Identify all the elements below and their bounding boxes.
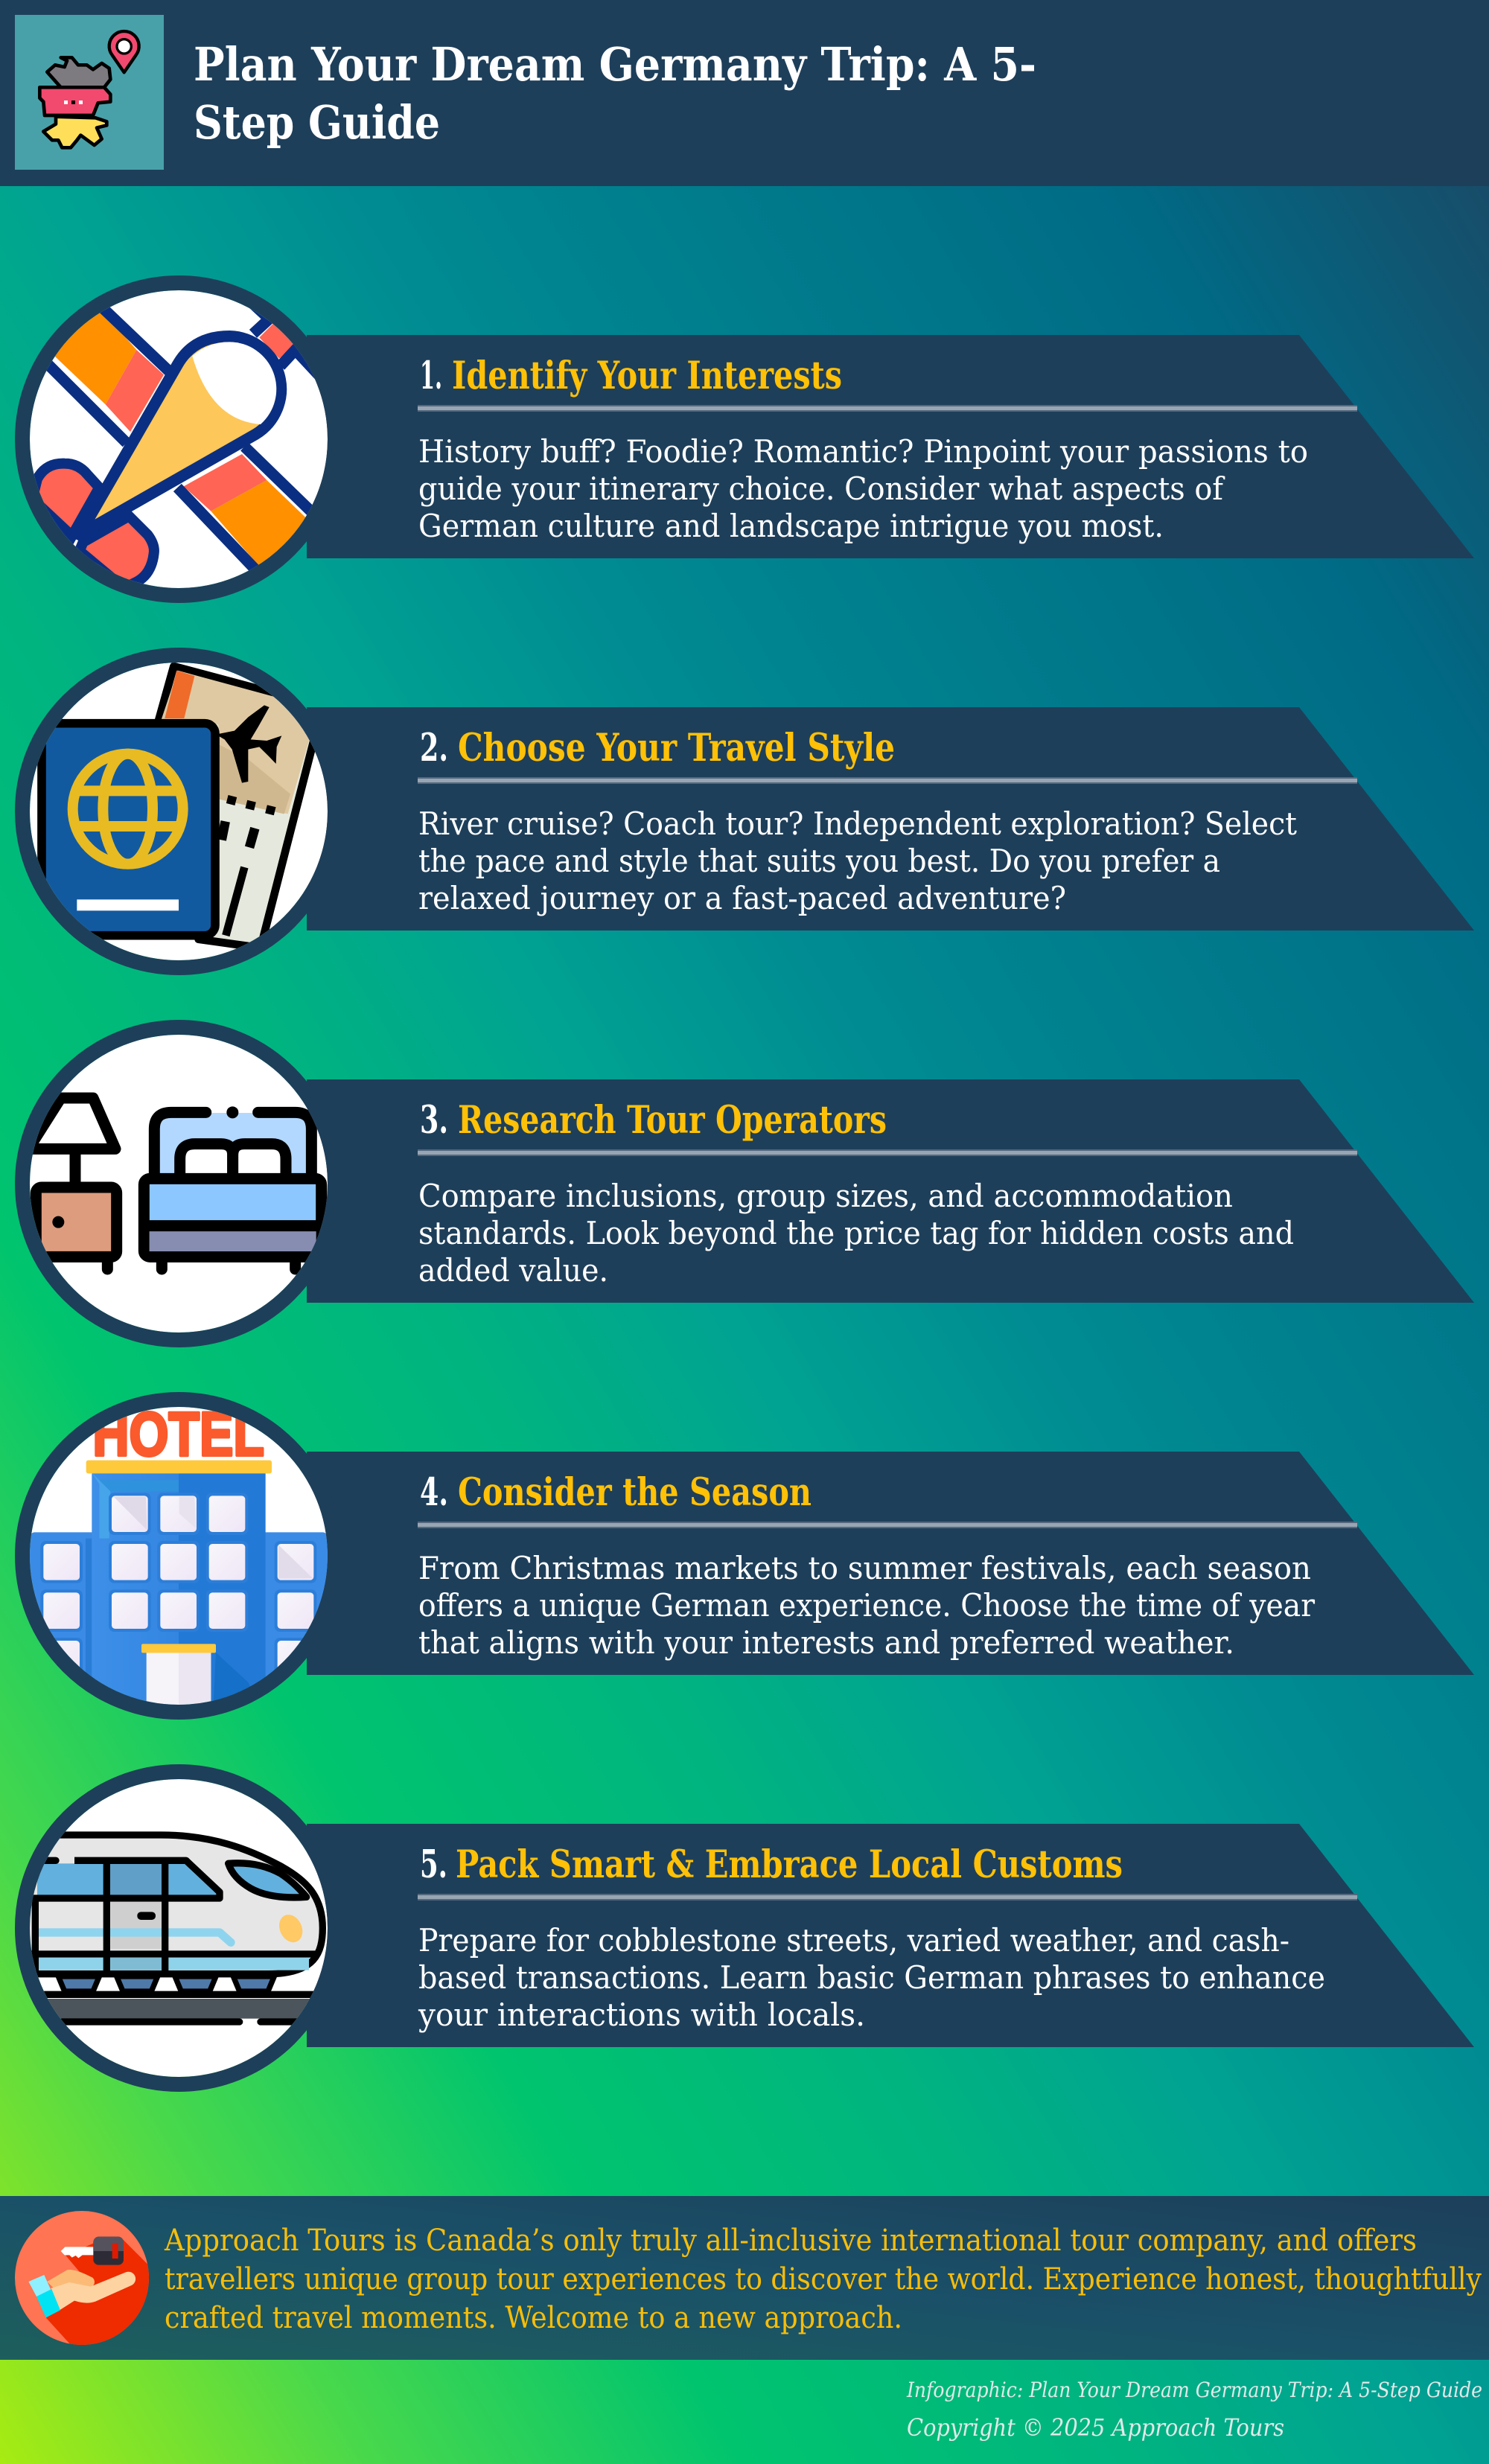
heading: step 5: Pack Smart & Embrace Local Customs xyxy=(456,1842,1123,1887)
heading: step 3: 3. xyxy=(420,1098,448,1143)
heading: step 4: 4. xyxy=(420,1470,448,1515)
text: step 1 body: guide your itinerary choice. Consider what aspects of xyxy=(418,470,1225,507)
panel: step 5 banner xyxy=(307,1824,1474,2047)
text: step 5 body: based transactions. Learn basic German phrases to enhance xyxy=(418,1959,1325,1996)
text: step 5 body: your interactions with locals. xyxy=(418,1997,865,2033)
title: Step Guide xyxy=(194,95,440,150)
icon: passport and ticket circle xyxy=(22,655,335,968)
text: step 3 body: standards. Look beyond the price tag for hidden costs and xyxy=(418,1215,1294,1251)
text: step 1 body: German culture and landscape intrigue you most. xyxy=(418,508,1164,544)
text: company description xyxy=(164,2224,1482,2335)
icon: map pin circle xyxy=(22,283,335,596)
text: company description: crafted travel moments. Welcome to a new approach. xyxy=(165,2301,902,2335)
icon: hotel circle xyxy=(22,1399,335,1712)
icon: Germany map with pin xyxy=(15,15,164,170)
footer credit text xyxy=(906,2378,1482,2442)
icon: hotel circle: HOTEL xyxy=(92,1399,264,1469)
text: step 2 body xyxy=(418,805,1297,916)
header bar xyxy=(0,0,1489,186)
heading: step 1: Identify Your Interests xyxy=(452,354,842,398)
text: step 4 body: that aligns with your interests and preferred weather. xyxy=(418,1624,1234,1661)
text: step 5 body: Prepare for cobblestone streets, varied weather, and cash- xyxy=(418,1922,1289,1959)
heading: step 4: Consider the Season xyxy=(458,1470,812,1515)
heading: step 5: 5. xyxy=(420,1842,447,1887)
text: step 4 body: offers a unique German experience. Choose the time of year xyxy=(418,1587,1316,1624)
text: step 3 body xyxy=(418,1178,1294,1289)
text: step 5 body xyxy=(418,1922,1325,2033)
footer credit text: Copyright © 2025 Approach Tours xyxy=(907,2413,1284,2442)
text: step 3 body: added value. xyxy=(418,1252,608,1289)
text: step 4 body: From Christmas markets to summer festivals, each season xyxy=(418,1550,1311,1586)
icon: hand holding key xyxy=(15,2211,149,2345)
icon: train circle xyxy=(15,1772,335,2084)
text: step 2 body: the pace and style that suits you best. Do you prefer a xyxy=(418,843,1220,879)
text: step 3 body: Compare inclusions, group sizes, and accommodation xyxy=(418,1178,1233,1214)
title xyxy=(194,37,1036,150)
text: step 2 body: River cruise? Coach tour? Independent exploration? Select xyxy=(418,805,1297,842)
text: step 2 body: relaxed journey or a fast-paced adventure? xyxy=(418,880,1066,916)
panel: step 2 banner xyxy=(307,707,1474,931)
heading: step 3: Research Tour Operators xyxy=(458,1098,887,1143)
text: step 1 body: History buff? Foodie? Romantic? Pinpoint your passions to xyxy=(418,433,1308,470)
text: company description: Approach Tours is Canada’s only truly all-inclusive international tour company, and offers xyxy=(164,2224,1417,2258)
panel: company footer band xyxy=(0,2196,1489,2360)
panel: step 1 banner xyxy=(307,335,1474,558)
heading: step 2: 2. xyxy=(420,726,448,770)
icon: bed and lamp circle xyxy=(22,1027,335,1340)
text: step 4 body xyxy=(418,1550,1316,1661)
panel: step 3 banner xyxy=(307,1079,1474,1303)
heading: step 1: 1. xyxy=(420,354,442,398)
text: step 1 body xyxy=(418,433,1308,544)
panel: step 4 banner xyxy=(307,1452,1474,1675)
title: Plan Your Dream Germany Trip: A 5- xyxy=(194,37,1036,92)
heading: step 2: Choose Your Travel Style xyxy=(458,726,895,770)
